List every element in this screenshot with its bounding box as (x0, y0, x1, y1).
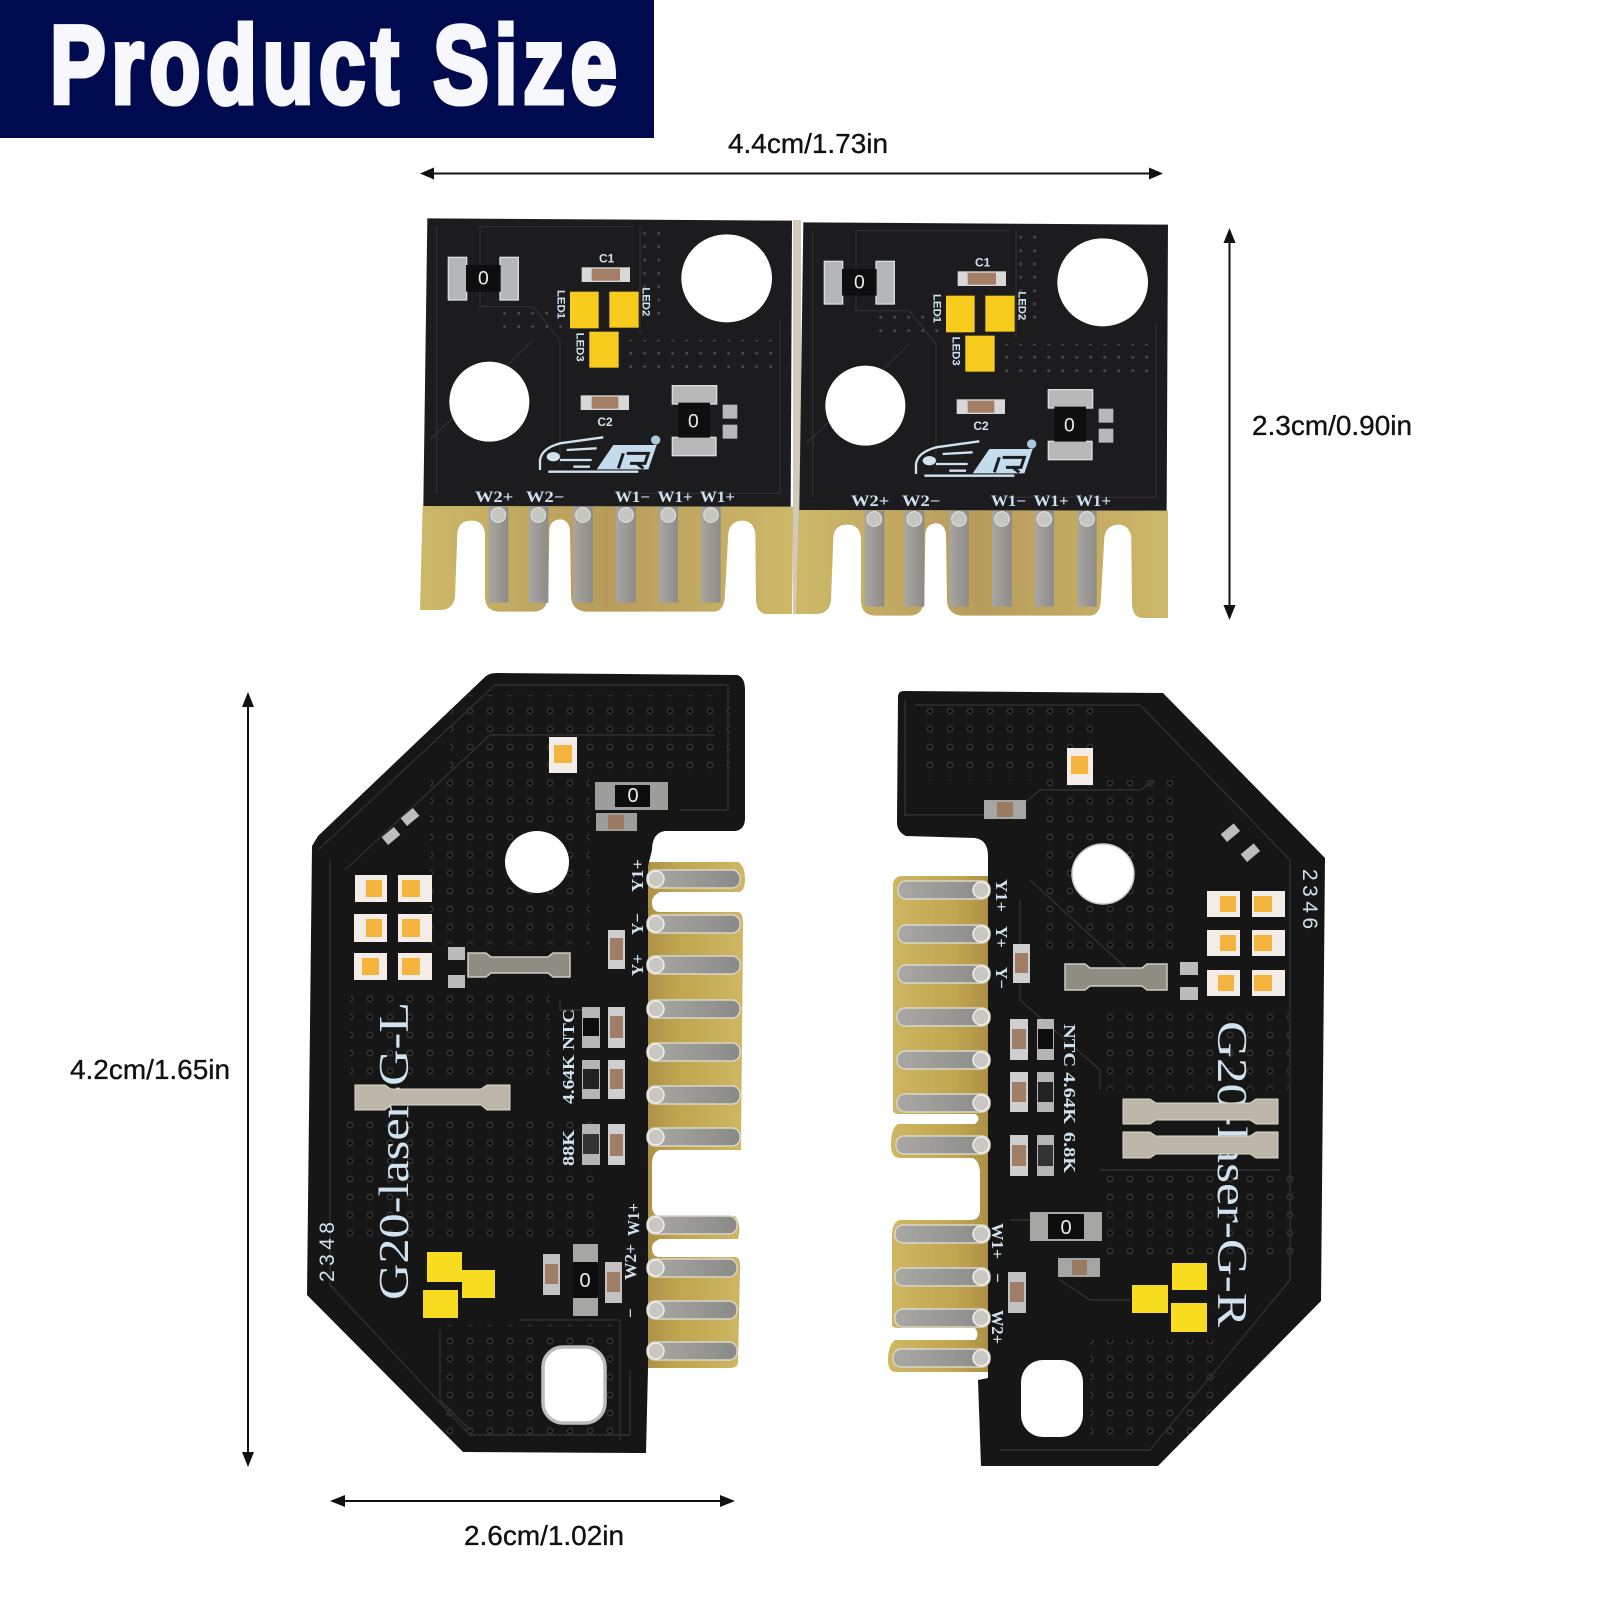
lower right board G20-laser-G-R (888, 691, 1325, 1466)
capacitor C1 2 (958, 256, 1006, 286)
silkscreen labels L: Y1+ (628, 859, 647, 892)
pad labels 2: W2+ (851, 493, 889, 510)
orange LED array L (354, 875, 432, 980)
tan edge connector 1 (420, 506, 793, 614)
resistor top left 2: 0 (854, 273, 865, 294)
capacitor C1 2: C1 (975, 256, 991, 270)
height dimension left: arrow and label (70, 692, 254, 1467)
height dimension right: arrow and label: 2.3cm/0.90in (1252, 410, 1412, 441)
silkscreen labels L: 4.64K NTC (559, 1009, 578, 1104)
metal jumper bars R (1065, 962, 1278, 1158)
mounting holes 2 (825, 238, 1148, 446)
SMD components R (984, 800, 1102, 1313)
vertical resistor 1 (672, 386, 737, 456)
silkscreen labels L: Y+ (628, 954, 647, 976)
pad labels 2: W1+ (1034, 493, 1069, 510)
mounting hole L (505, 831, 569, 893)
resistor top left 1 (448, 257, 518, 300)
contact fingers 1 (488, 507, 721, 603)
vertical resistor 2 (1048, 390, 1113, 460)
capacitor C1 1 (582, 252, 630, 282)
silkscreen labels R: 6.8K (1060, 1132, 1079, 1174)
silkscreen labels R: NTC 4.64K (1060, 1024, 1079, 1125)
width dimension top: arrow and label: 4.4cm/1.73in (728, 128, 888, 159)
silkscreen labels R (988, 869, 1321, 1344)
SMD components L: 0 (627, 785, 639, 807)
silkscreen labels R: W2+ (988, 1310, 1007, 1344)
yellow LEDs 2 (930, 291, 1028, 372)
capacitor C2 1 (581, 395, 629, 429)
yellow LEDs 1: LED2 (640, 287, 652, 316)
yellow LEDs 2: LED3 (950, 337, 962, 366)
width dimension bottom: arrow and label: 2.6cm/1.02in (464, 1520, 624, 1551)
board title R: G20-laser-G-R (1208, 1021, 1254, 1327)
capacitor C2 2: C2 (973, 419, 989, 433)
capacitor C2 2 (957, 399, 1005, 433)
vertical resistor 1: 0 (688, 411, 699, 432)
resistor top left 2 (824, 261, 894, 304)
metal jumper bars L (355, 947, 570, 1110)
yellow LEDs L (423, 1252, 495, 1318)
width dimension top: arrow and label (420, 128, 1163, 180)
height dimension right: arrow and label (1224, 228, 1412, 620)
yellow LEDs 2: LED1 (930, 294, 942, 323)
pad labels 1: W1− (615, 489, 650, 506)
silkscreen labels L: 88K (559, 1129, 578, 1166)
SMD components R: 0 (1060, 1217, 1072, 1239)
logo 1 (540, 435, 660, 472)
silkscreen labels L (316, 859, 647, 1318)
height dimension left: arrow and label: 4.2cm/1.65in (70, 1054, 230, 1085)
pad labels 2: W1− (991, 493, 1026, 510)
board divider groove (793, 220, 801, 614)
pad labels 2: W2− (902, 493, 940, 510)
slot hole L (543, 1347, 605, 1423)
pad labels 1: W1+ (700, 489, 735, 506)
SMD components L: 0 (579, 1270, 591, 1292)
silkscreen labels R: Y1+ (992, 879, 1011, 912)
yellow LEDs R (1132, 1263, 1207, 1332)
yellow LEDs 1 (554, 287, 652, 368)
pad labels 1: W2− (526, 489, 564, 506)
top board 1 (420, 218, 793, 614)
capacitor C1 1: C1 (599, 252, 615, 266)
mounting holes 1 (449, 234, 772, 442)
logo 2 (916, 439, 1036, 476)
black board body 2 (799, 222, 1168, 511)
top board 2 (796, 222, 1168, 618)
silkscreen labels R: − (988, 1273, 1007, 1283)
top single LED R (1067, 748, 1093, 785)
board title L: G20-laser-G-L (372, 1002, 418, 1300)
silkscreen labels R: Y+ (992, 926, 1011, 948)
pad labels 2 (851, 493, 1111, 510)
silkscreen labels L: Y− (628, 913, 647, 935)
black board body L (307, 673, 745, 1453)
silkscreen labels R: Y− (992, 967, 1011, 989)
silver angled pads L (382, 808, 419, 845)
vertical resistor 2: 0 (1064, 415, 1075, 436)
black board body 1 (423, 218, 792, 507)
contact fingers L (647, 870, 740, 1360)
width dimension bottom: arrow and label (330, 1495, 735, 1551)
tan edge connector R (888, 876, 994, 1372)
black board body R (897, 691, 1325, 1466)
resistor top left 1: 0 (478, 269, 489, 290)
via dots and traces L (318, 685, 730, 1440)
silkscreen labels R: W1+ (988, 1223, 1007, 1259)
tan edge connector 2 (796, 510, 1168, 618)
yellow LEDs 1: LED3 (574, 333, 586, 362)
silkscreen labels L: 2348 (316, 1222, 339, 1282)
silkscreen labels L: W1+ (624, 1203, 643, 1236)
contact fingers R (893, 881, 990, 1367)
yellow LEDs 2: LED2 (1016, 291, 1028, 320)
mounting hole R (1072, 844, 1134, 904)
pad labels 2: W1+ (1076, 493, 1111, 510)
capacitor C2 1: C2 (597, 415, 613, 429)
silver angled pads R (1221, 823, 1260, 862)
pad labels 1: W2+ (475, 489, 513, 506)
SMD components L (543, 782, 668, 1316)
silkscreen labels L: W2+ (621, 1244, 640, 1280)
orange LED array R (1207, 891, 1285, 996)
pad labels 1 (475, 489, 735, 506)
contact fingers 2 (864, 511, 1097, 607)
top single LED L (549, 737, 577, 773)
via dots and traces R (905, 700, 1305, 1450)
lower left board G20-laser-G-L (307, 673, 745, 1453)
tan edge connector L (640, 862, 745, 1368)
slot hole R (1021, 1360, 1083, 1437)
yellow LEDs 1: LED1 (554, 290, 566, 319)
silkscreen labels L: − (621, 1308, 640, 1318)
title banner: Product Size (50, 4, 617, 127)
silkscreen labels R: 2346 (1298, 869, 1321, 929)
pad labels 1: W1+ (658, 489, 693, 506)
